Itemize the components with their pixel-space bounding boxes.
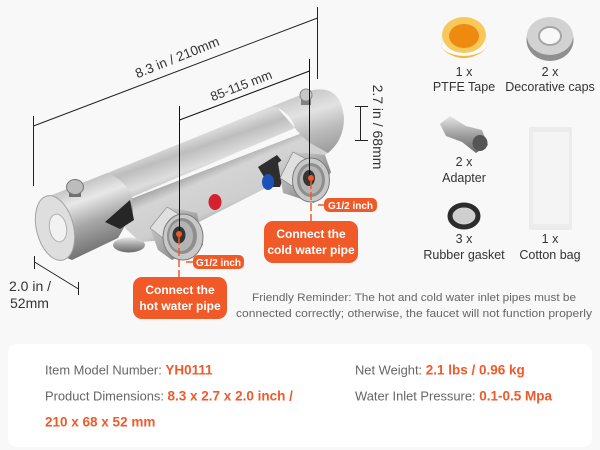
cold water connector [264,175,377,263]
hot water connector [133,231,244,319]
accessory: cotton bag [519,127,581,262]
label: hot water pipe [133,277,227,319]
dimension: pipe spacing [180,59,310,235]
dimension: overall length [34,7,318,186]
label: hot water pipe: Connect the [145,283,215,297]
centre block [125,130,328,242]
accessory: adapter [440,116,488,185]
cold nut [278,152,331,203]
dimension: width: 52mm [10,295,49,311]
panel: specifications [8,344,592,447]
spec: dimensions: Product Dimensions: 8.3 x 2.7 x 2.0 inch / [45,388,293,404]
cold side valve [258,155,287,187]
blue dot [262,174,274,190]
faucet illustration [29,89,344,264]
accessory: PTFE tape: 1 x [456,65,473,79]
friendly reminder note: Friendly Reminder: The hot and cold water inlet pipes must be [252,292,576,304]
friendly reminder note [236,292,593,320]
label: cold water pipe: cold water pipe [267,243,355,257]
dimension: overall length: 8.3 in / 210mm [133,34,221,81]
hot side valve [105,200,134,229]
screw right [300,89,312,105]
label: G1/2 hot: G1/2 inch [196,258,241,269]
spec: net weight: Net Weight: 2.1 lbs / 0.96 kg [355,362,525,378]
end button [47,213,69,243]
accessory: rubber gasket [423,205,505,262]
spec: model number: Item Model Number: YH0111 [45,362,213,378]
label: G1/2 cold: G1/2 inch [328,201,373,212]
lower thread [113,238,145,252]
label: cold water pipe: Connect the [276,227,346,241]
accessory: decorative caps [505,17,595,94]
dimension: height: 2.7 in / 68mm [370,85,386,169]
spec: water pressure: Water Inlet Pressure: 0.1-0.5 Mpa [355,388,552,404]
red dot [208,194,222,210]
dimension: width [9,256,78,311]
spec: dimensions metric: 210 x 68 x 52 mm [45,414,155,430]
dimension: height [355,85,386,169]
accessory: rubber gasket: Rubber gasket [423,248,505,262]
hot nut [150,207,203,260]
accessory: rubber gasket: 3 x [456,232,473,246]
end face [29,192,81,264]
accessory: decorative caps: Decorative caps [505,80,595,94]
accessory: adapter: Adapter [442,171,486,185]
label: hot water pipe: hot water pipe [139,299,221,313]
accessory: cotton bag: Cotton bag [519,248,581,262]
left cap housing [40,173,133,260]
friendly reminder note: connected correctly; otherwise, the faucet will not function properly [236,308,593,320]
dimension: pipe spacing: 85-115 mm [208,67,274,104]
accessory: PTFE tape [433,17,495,94]
dimension: width: 2.0 in / [9,278,51,294]
upper tube [105,105,295,197]
accessory: decorative caps: 2 x [542,65,559,79]
accessory: PTFE tape: PTFE Tape [433,80,495,94]
right end cap [273,89,344,153]
accessory: cotton bag: 1 x [542,232,559,246]
accessory: adapter: 2 x [456,155,473,169]
label: cold water pipe [264,221,358,263]
screw left [66,180,84,197]
